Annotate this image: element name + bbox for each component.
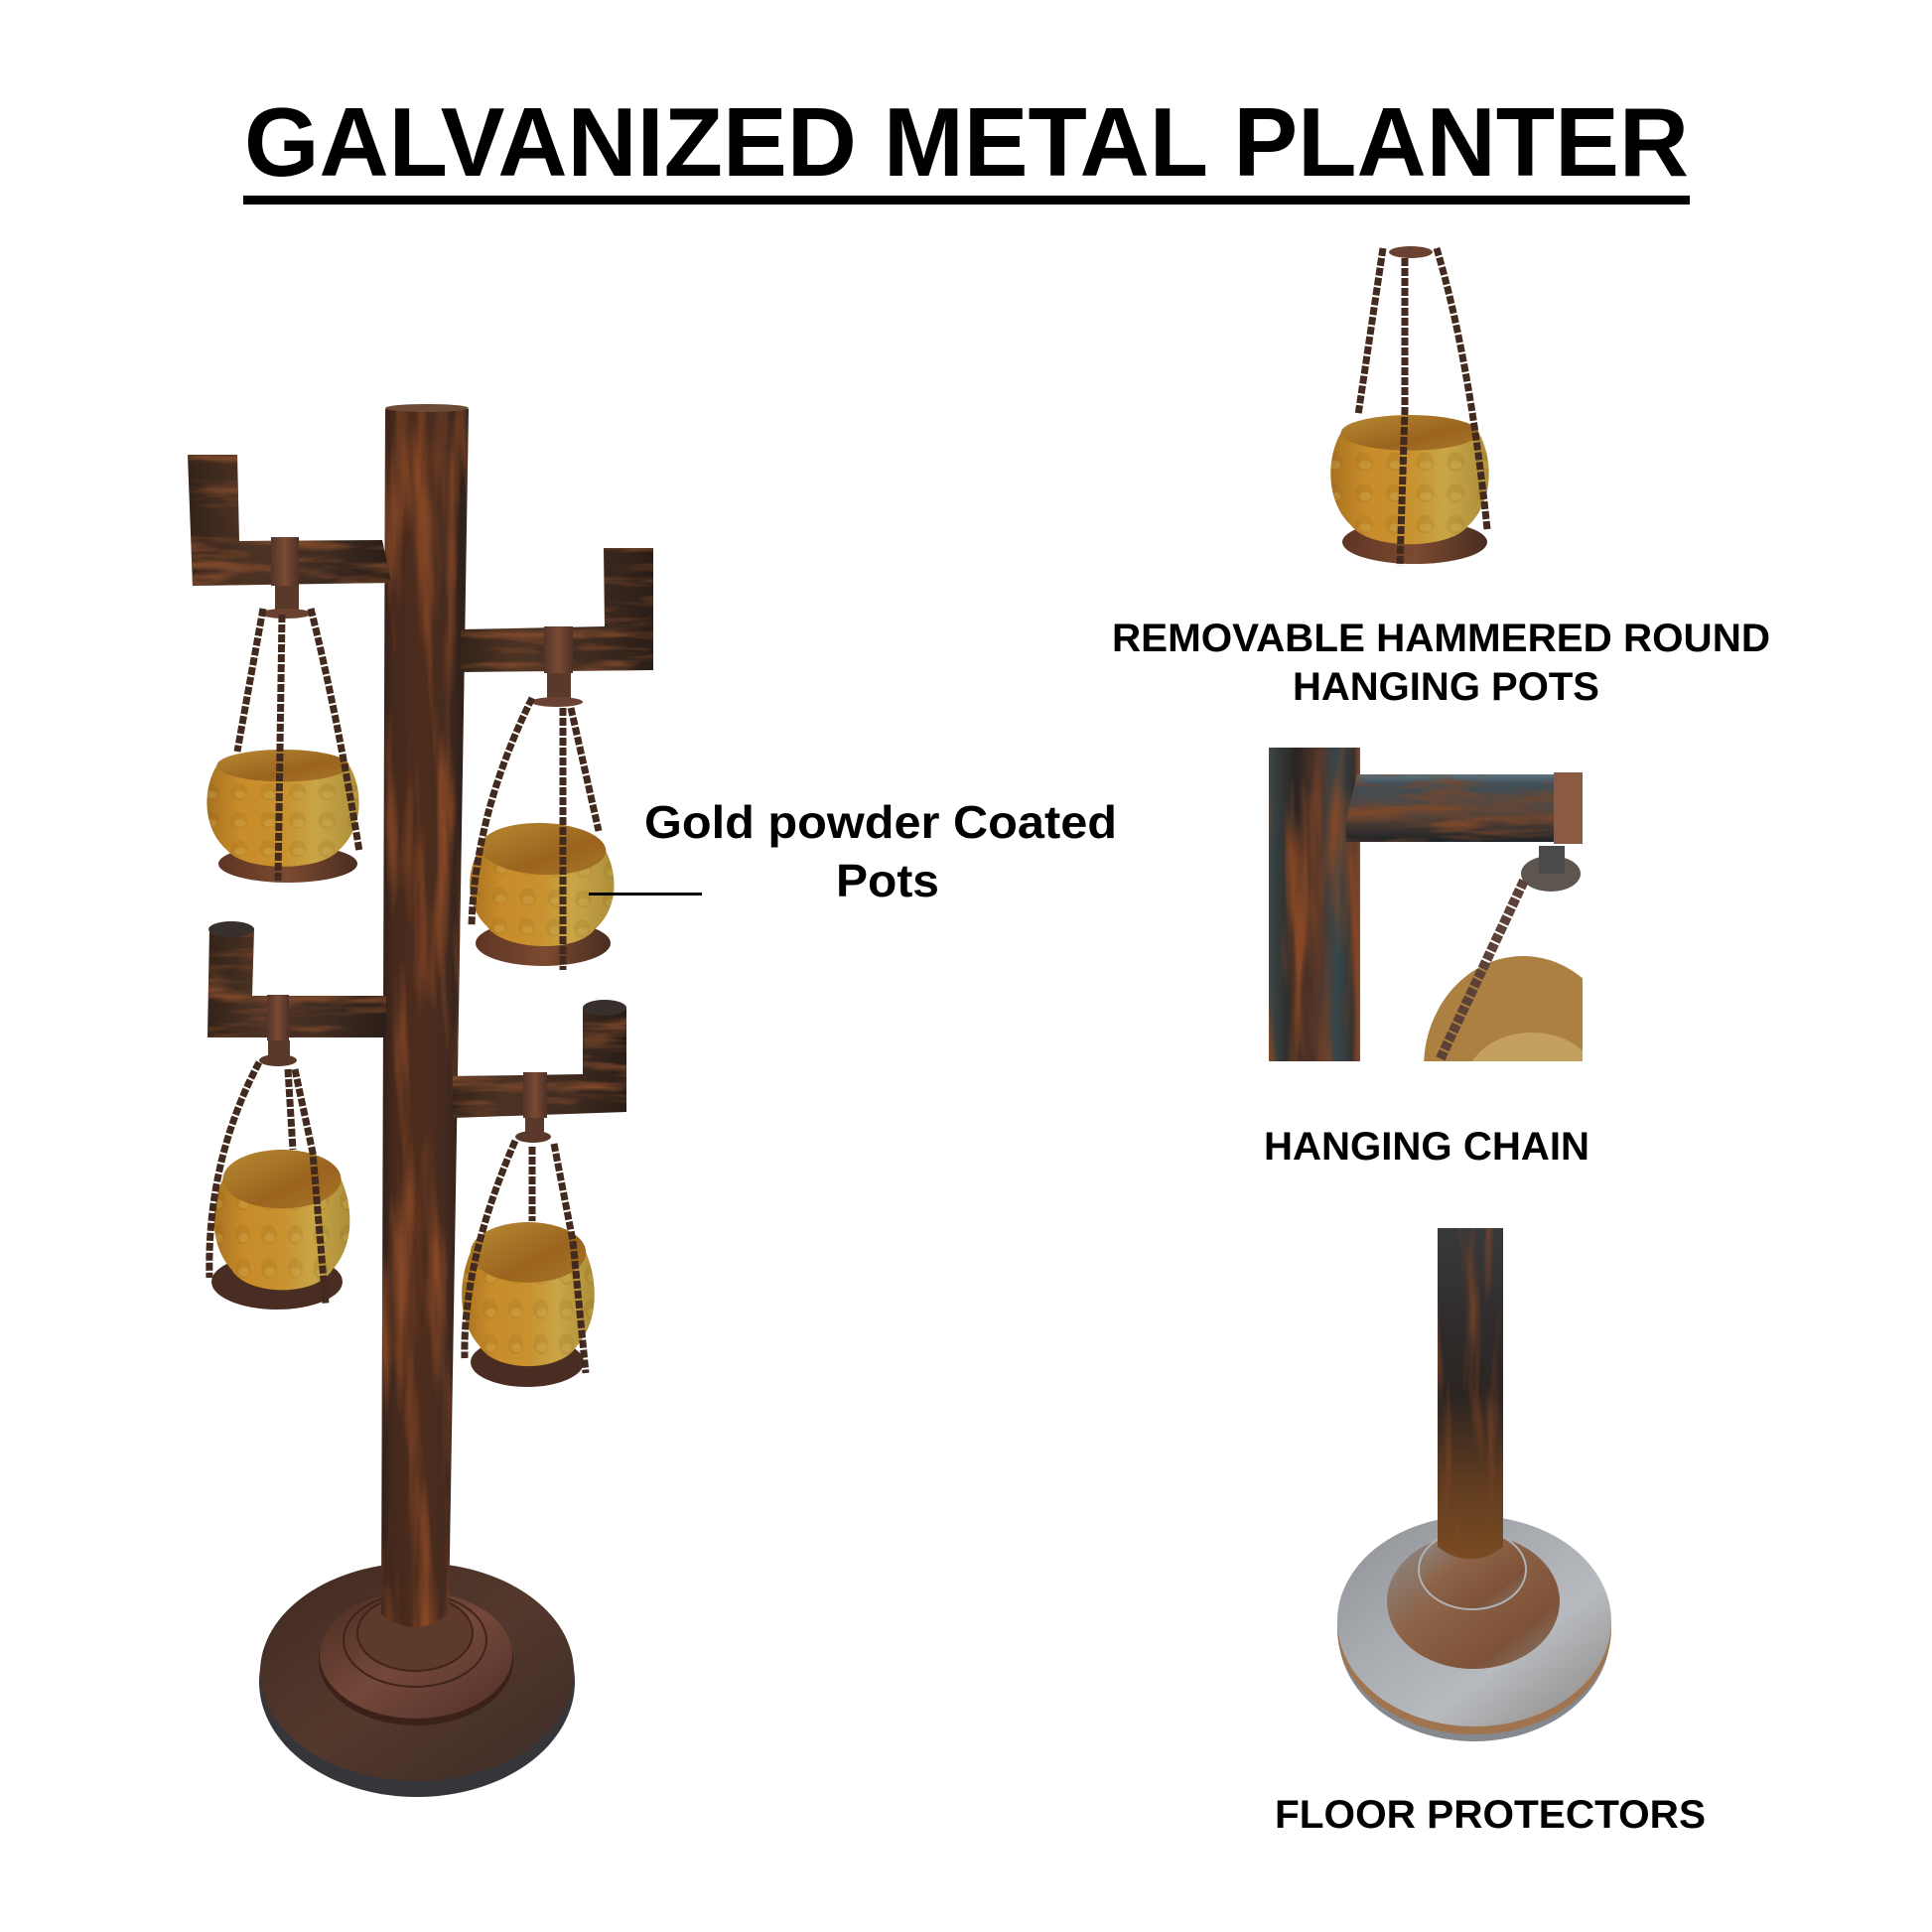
base disc [259,1563,575,1797]
detail photo: hanging pot [1330,246,1489,566]
clamp [1554,772,1583,844]
pole stub [1438,1228,1503,1559]
chain close-up [1440,881,1524,1060]
pole section [1269,748,1360,1061]
front chains [1400,258,1405,566]
washer and bolt [1521,846,1581,892]
base stepped collar [319,1591,513,1725]
main pole top [385,404,469,412]
caption: removable pots: HANGING POTS [1293,665,1599,709]
detail photo: floor protector base [1337,1228,1611,1741]
arm section [1345,774,1554,842]
hanging pot lower right [462,1141,595,1387]
pot close-up [1424,956,1583,1061]
lower left arm [207,921,386,1066]
top washer [1389,246,1433,258]
lower rim [1338,1525,1610,1741]
upper left arm [188,455,391,619]
back chains [1358,248,1383,415]
upper collar [1419,1530,1526,1609]
upper right arm [461,548,653,707]
caption: hanging chain: HANGING CHAIN [1264,1125,1589,1169]
callout text: gold pots: Pots [836,855,939,906]
caption: floor protectors: FLOOR PROTECTORS [1275,1793,1706,1837]
hanging pot lower left [209,1062,349,1310]
callout leader line [589,893,702,896]
detail photo: hanging chain [1269,748,1583,1061]
title: GALVANIZED METAL PLANTER [244,87,1689,197]
pot [1330,415,1489,544]
copper band [1337,1524,1611,1734]
caption: removable pots: REMOVABLE HAMMERED ROUND [1112,617,1770,660]
lower right arm [453,1000,626,1143]
main pole [381,409,469,1627]
hanging pot upper right [468,698,617,970]
hanging pot upper left [207,609,359,883]
middle collar [1387,1534,1560,1669]
main planter photo [188,404,653,1797]
silver disc [1337,1516,1611,1726]
saucer [1342,520,1487,564]
title underline [243,196,1690,205]
callout text: gold pots: Gold powder Coated [644,796,1117,848]
right chain [1437,248,1487,529]
